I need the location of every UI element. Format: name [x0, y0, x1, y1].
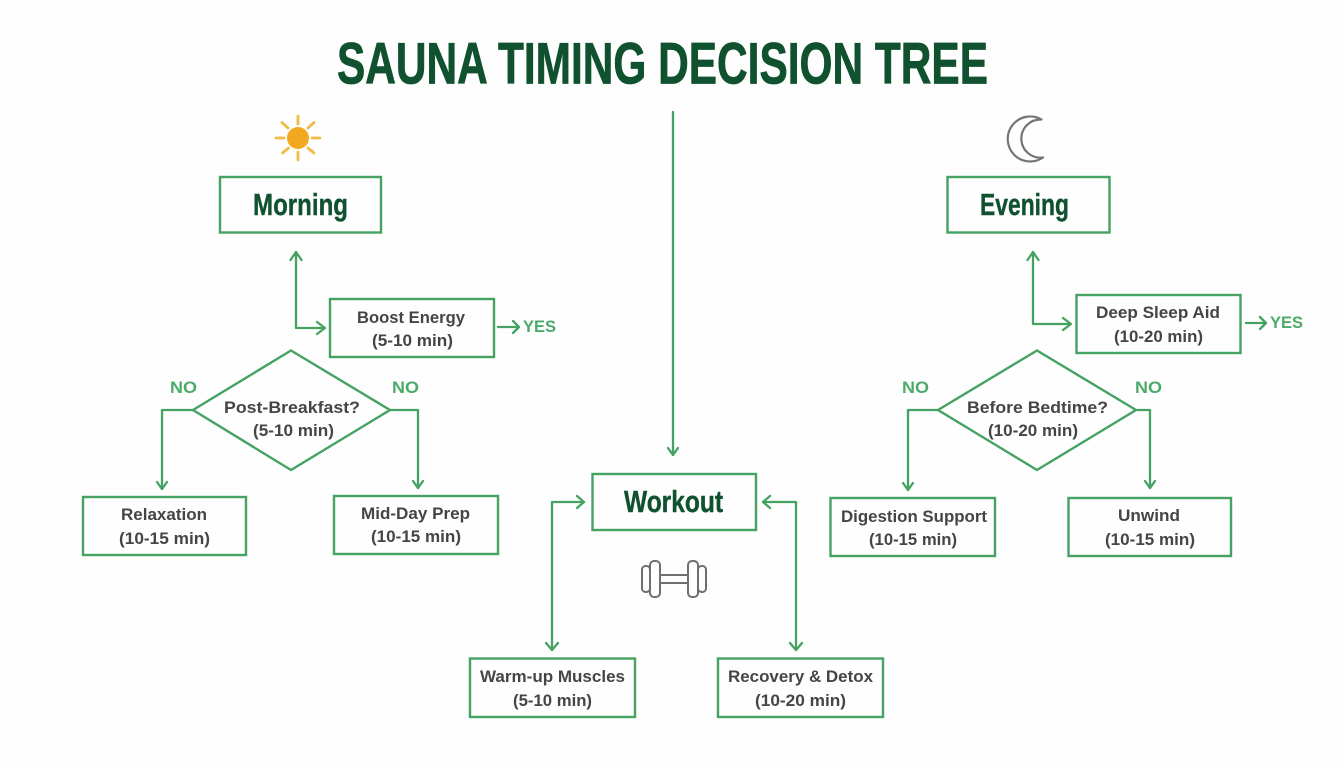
box: recovery and detox: (10-20 min)	[755, 691, 846, 710]
decision: before bedtime	[938, 350, 1136, 470]
box: deep sleep aid	[1076, 295, 1240, 353]
yes label: YES	[523, 317, 556, 336]
box: relaxation	[83, 497, 246, 555]
arrow: workout to recovery	[763, 496, 802, 650]
arrow: no to mid-day prep	[390, 410, 423, 488]
box: unwind	[1068, 498, 1231, 556]
decision: before bedtime: (10-20 min)	[988, 421, 1078, 440]
decision: post-breakfast	[193, 350, 390, 470]
decision: post-breakfast: (5-10 min)	[253, 421, 334, 440]
box: digestion support: Digestion Support	[841, 507, 987, 526]
box: warm-up muscles	[470, 658, 635, 717]
yes label	[1246, 313, 1303, 332]
heading: evening: Evening	[980, 188, 1069, 222]
arrow: title to workout	[668, 112, 678, 455]
box: relaxation: Relaxation	[121, 505, 207, 524]
label: no left: NO	[902, 378, 929, 397]
title: SAUNA TIMING DECISION TREE	[337, 32, 988, 96]
panel: evening branch	[830, 116, 1303, 556]
box: unwind: (10-15 min)	[1105, 530, 1195, 549]
box: relaxation: (10-15 min)	[119, 529, 210, 548]
arrow: no to unwind	[1136, 410, 1155, 488]
box: deep sleep aid: (10-20 min)	[1114, 327, 1203, 346]
box: unwind: Unwind	[1118, 506, 1180, 525]
yes label	[498, 317, 556, 336]
arrow: boost energy to morning	[290, 252, 325, 334]
heading: workout: Workout	[624, 485, 723, 519]
icon: sun	[276, 116, 320, 160]
box: warm-up muscles: (5-10 min)	[513, 691, 592, 710]
heading: workout	[592, 474, 756, 530]
box: deep sleep aid: Deep Sleep Aid	[1096, 303, 1220, 322]
box: recovery and detox	[718, 658, 883, 717]
label: no right: NO	[392, 378, 419, 397]
box: boost energy: Boost Energy	[357, 308, 466, 327]
icon: moon	[1008, 116, 1043, 161]
box: digestion support: (10-15 min)	[869, 530, 957, 549]
box: mid-day prep: Mid-Day Prep	[361, 504, 470, 523]
decision: post-breakfast: Post-Breakfast?	[224, 398, 360, 417]
decision: before bedtime: Before Bedtime?	[967, 398, 1108, 417]
arrow: workout to warm-up	[546, 496, 584, 650]
box: boost energy: (5-10 min)	[372, 331, 453, 350]
box: warm-up muscles: Warm-up Muscles	[480, 667, 625, 686]
heading: evening	[948, 177, 1110, 232]
yes label: YES	[1270, 313, 1303, 332]
arrow: no to relaxation	[157, 410, 193, 489]
panel: workout branch	[470, 474, 883, 717]
icon: dumbbell	[642, 561, 706, 597]
label: no right: NO	[1135, 378, 1162, 397]
arrow: deep sleep to evening	[1028, 252, 1071, 330]
panel: morning branch	[83, 116, 556, 555]
box: recovery and detox: Recovery & Detox	[728, 667, 874, 686]
box: mid-day prep: (10-15 min)	[371, 527, 461, 546]
label: no left: NO	[170, 378, 197, 397]
arrow: no to digestion support	[903, 410, 938, 490]
box: boost energy	[330, 299, 494, 357]
heading: morning: Morning	[253, 188, 348, 222]
heading: morning	[220, 177, 381, 232]
box: digestion support	[830, 498, 995, 556]
box: mid-day prep	[334, 496, 498, 554]
